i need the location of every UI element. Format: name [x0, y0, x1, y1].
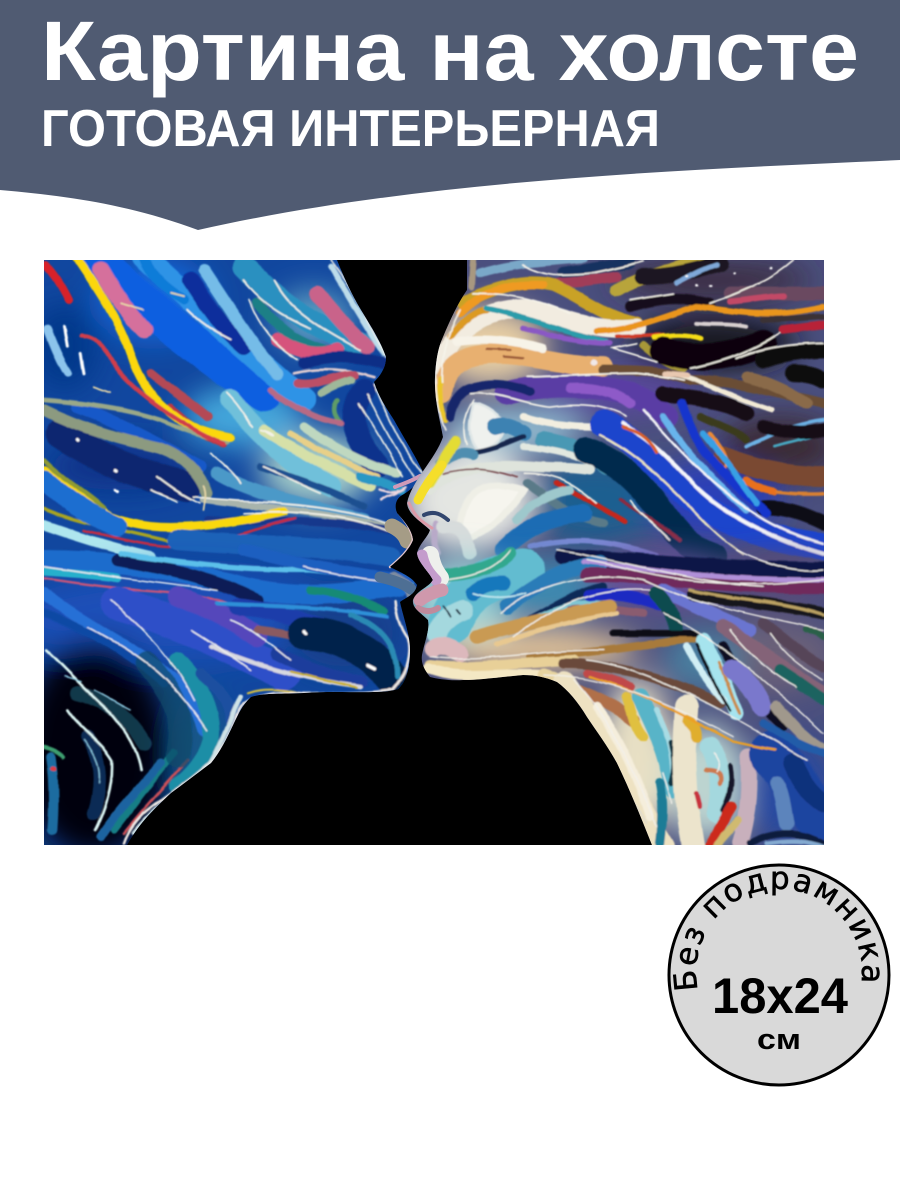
badge circle: [669, 865, 889, 1085]
header banner: [0, 0, 900, 230]
right face lips and nose: [409, 465, 448, 611]
painting black background: [127, 260, 652, 845]
title: Картина на холсте: [41, 4, 859, 98]
left face lower half brushwork: [44, 550, 416, 845]
right face upper half brushwork: [403, 258, 840, 557]
size: 18x24: [712, 968, 848, 1024]
right face: profile with flowing hair: [400, 255, 840, 850]
subtitle: ГОТОВАЯ ИНТЕРЬЕРНАЯ: [41, 100, 660, 158]
left face lips: [380, 476, 420, 589]
curved label: without stretcher: Без подрамника: [672, 871, 880, 990]
left face: blue profile: [44, 260, 423, 845]
unit: см: [757, 1024, 801, 1056]
painting: two abstract faces kissing: [11, 255, 840, 860]
size badge: [668, 864, 890, 1086]
right face lower half brushwork: [407, 550, 837, 847]
left face upper half brushwork: [31, 257, 422, 557]
